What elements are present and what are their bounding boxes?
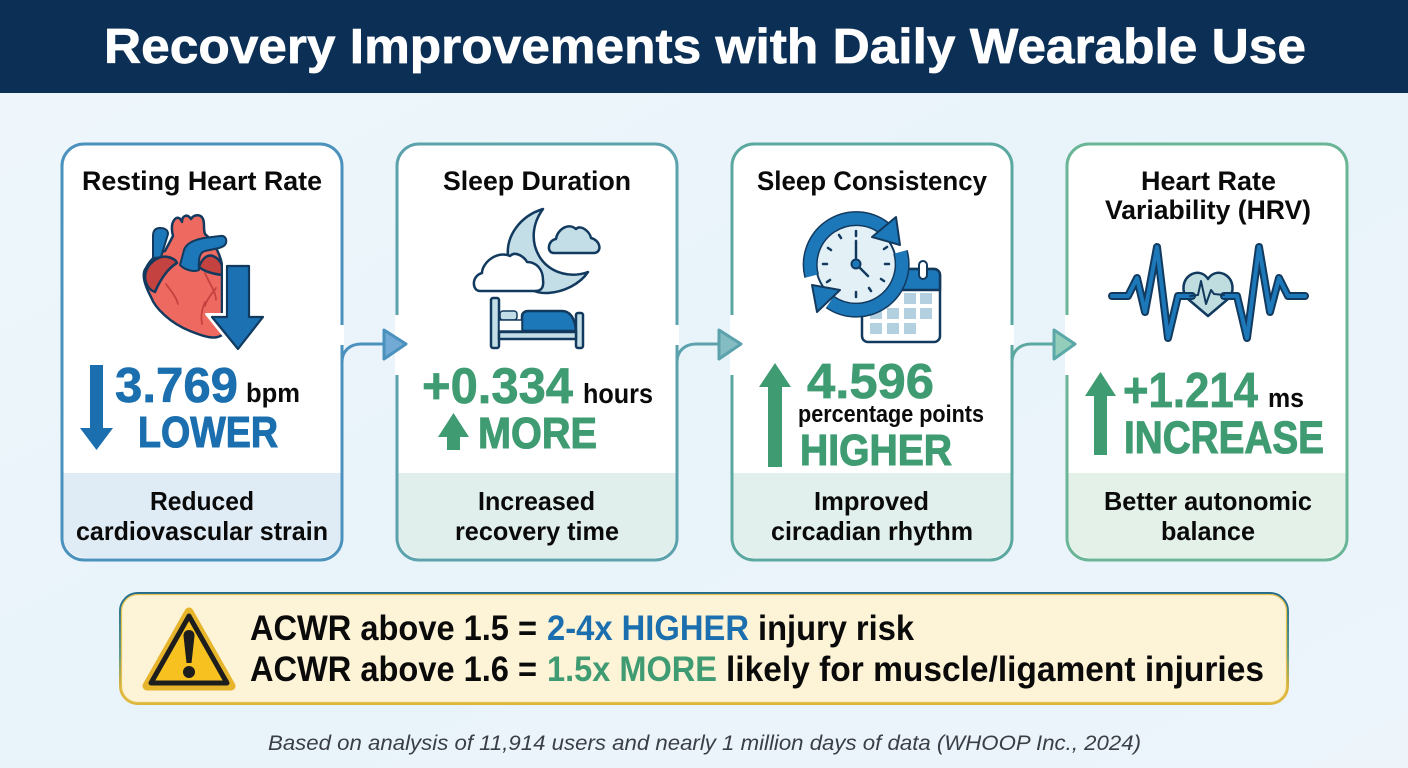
card heading: Variability (HRV) [1105, 195, 1311, 225]
icon: up arrow [759, 363, 791, 467]
caption band [398, 473, 676, 558]
arrow: sleep consistency to hrv [1009, 315, 1075, 375]
arrow: sleep duration to sleep consistency [674, 315, 741, 375]
caption band [64, 473, 340, 558]
caption: cardiovascular strain [76, 516, 328, 546]
header band [0, 0, 1408, 93]
caption [771, 486, 973, 546]
stat label: INCREASE [1124, 412, 1324, 463]
stat unit: ms [1268, 383, 1304, 413]
card heading [1105, 166, 1311, 225]
stat unit: hours [583, 378, 653, 409]
title: Recovery Improvements with Daily Wearable Use [104, 20, 1306, 74]
stat label: HIGHER [800, 426, 952, 475]
caption: Reduced [150, 486, 254, 516]
panel: resting heart rate [62, 144, 342, 560]
panel: heart rate variability [1067, 144, 1347, 560]
risk line two: ACWR above 1.6 = [250, 650, 537, 689]
caption: Improved [814, 486, 929, 516]
caption: Increased [478, 486, 595, 516]
card heading: Resting Heart Rate [82, 166, 322, 196]
caption band [1068, 473, 1346, 558]
card heading: Sleep Consistency [757, 166, 987, 196]
stat value: +1.214 [1123, 364, 1258, 418]
risk line one: 2-4x HIGHER [547, 609, 749, 648]
icon: warning triangle [147, 612, 231, 686]
caption [1104, 486, 1312, 546]
caption: balance [1161, 516, 1255, 546]
source footnote: Based on analysis of 11,914 users and nearly 1 million days of data (WHOOP Inc., 2024) [268, 732, 1141, 755]
arrow: resting heart rate to sleep duration [339, 315, 406, 375]
caption [455, 486, 619, 546]
caption: Better autonomic [1104, 486, 1312, 516]
icon: heart with down arrow [144, 215, 270, 354]
risk line one: injury risk [758, 609, 914, 648]
icon: clock and calendar [810, 217, 940, 342]
stat unit: bpm [246, 378, 300, 408]
callout: ACWR injury risk [120, 593, 1288, 704]
risk line one [250, 609, 914, 648]
stat label: MORE [478, 409, 597, 458]
caption: circadian rhythm [771, 516, 973, 546]
stat unit: percentage points [798, 401, 984, 428]
stat value: 4.596 [807, 355, 934, 409]
caption: recovery time [455, 516, 619, 546]
stat value: 3.769 [115, 359, 238, 413]
caption band [734, 473, 1010, 558]
caption [76, 486, 328, 546]
stat label: LOWER [138, 408, 278, 457]
risk line one: ACWR above 1.5 = [250, 609, 537, 648]
icon: heartbeat line with heart [1112, 247, 1305, 338]
icon: up arrow [1085, 372, 1116, 455]
risk line two [250, 650, 1264, 689]
risk line two: 1.5x MORE [547, 650, 717, 689]
icon: up arrow [438, 413, 469, 450]
icon: moon, clouds and bed [474, 209, 599, 348]
panel: sleep consistency [732, 144, 1012, 560]
risk line two: likely for muscle/ligament injuries [726, 650, 1264, 689]
card heading: Sleep Duration [443, 166, 631, 196]
stat value: +0.334 [422, 358, 573, 414]
panel: sleep duration [397, 144, 677, 560]
card heading: Heart Rate [1141, 166, 1276, 196]
icon: down arrow [80, 365, 113, 450]
